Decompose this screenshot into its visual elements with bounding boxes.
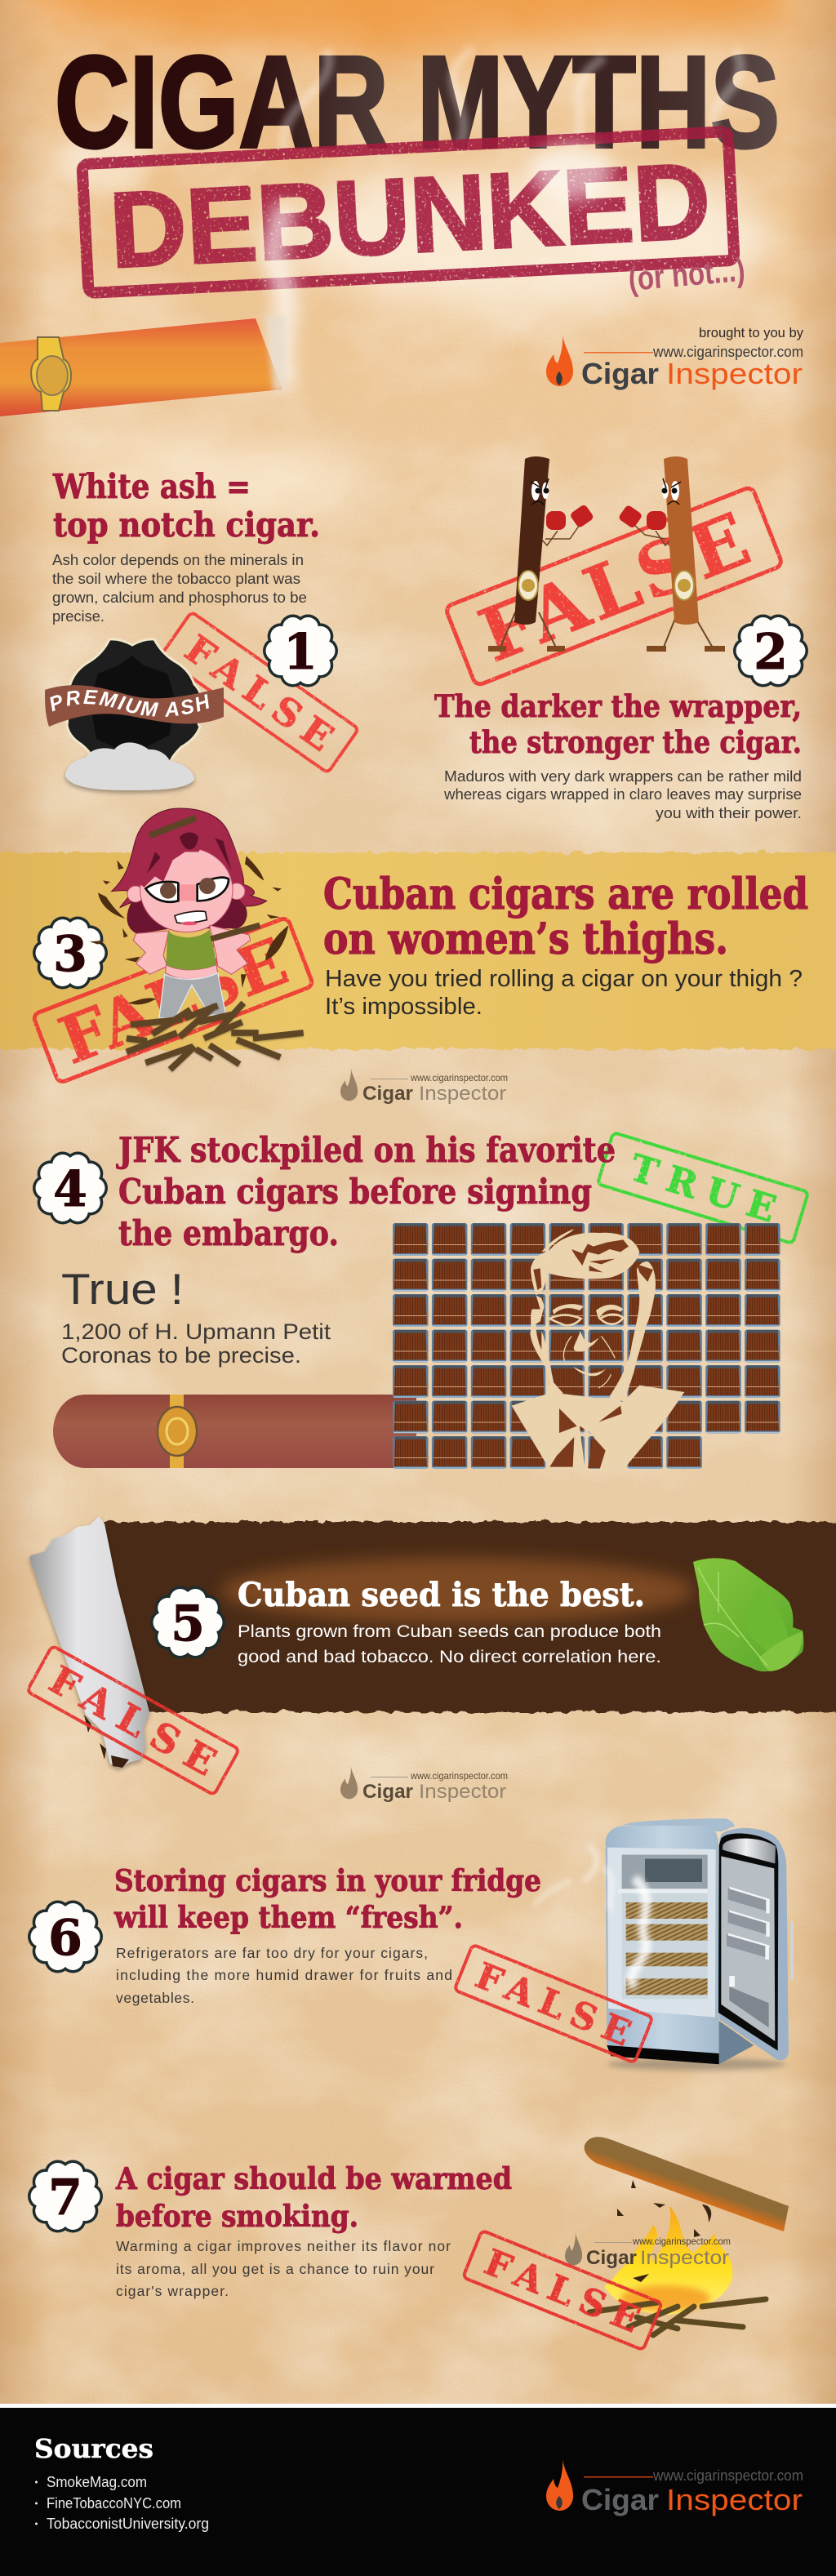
arms [133, 931, 169, 974]
logo: watermark 3 [565, 2232, 731, 2269]
logo: watermark 3: Inspector [640, 2247, 729, 2269]
myth 7 body text: cigar's wrapper. [116, 2283, 229, 2299]
logo: Cigar Inspector header [546, 335, 803, 390]
logo: footer: www.cigarinspector.com [652, 2467, 803, 2484]
embers [617, 2180, 711, 2282]
panel: yellow torn band [0, 852, 836, 1049]
pants [159, 973, 226, 1018]
illustration: boxing cigars [488, 456, 725, 652]
myth 4 body text: Coronas to be precise. [61, 1343, 301, 1368]
myth 2 heading [434, 688, 802, 760]
myth 3 body text [325, 966, 803, 1020]
badge: 7 [28, 2160, 103, 2232]
myth 2 body text: whereas cigars wrapped in claro leaves may surprise [443, 786, 802, 803]
lips [573, 1367, 607, 1376]
logo: watermark 2: www.cigarinspector.com [410, 1770, 508, 1782]
flying tobacco leaves [90, 856, 288, 1004]
icon: torn paper curl [29, 1516, 149, 1768]
firewood [589, 2299, 766, 2335]
logo: Cigar Inspector header: www.cigarinspector.com [652, 344, 803, 360]
badge: 4 [33, 1151, 108, 1225]
light cigar [664, 456, 699, 625]
sources list: TobacconistUniversity.org [47, 2516, 209, 2532]
myth 1 heading: top notch cigar. [53, 505, 320, 545]
freezer [622, 1855, 708, 1889]
hair outline [541, 1229, 574, 1252]
myth 7 body text [116, 2238, 451, 2299]
icon: premium ash seal [45, 638, 224, 795]
badge: 6 [28, 1901, 103, 1973]
collar and chest [512, 1386, 684, 1470]
illustration: JFK portrait cutout [512, 1229, 684, 1470]
stamp: false 3: FALSE [49, 923, 298, 1079]
myth 1 heading [52, 467, 320, 545]
eyes [178, 884, 198, 901]
face [140, 848, 233, 932]
left hair and temple [531, 1252, 549, 1296]
illustration: lit cigar [0, 314, 286, 416]
brush stroke [220, 1558, 694, 1623]
myth 4 body text: 1,200 of H. Upmann Petit [61, 1319, 331, 1344]
brought to you by: brought to you by [699, 325, 803, 340]
myth 6 heading [113, 1864, 541, 1935]
sources list: FineTobaccoNYC.com [47, 2495, 181, 2511]
myth 6 body text: vegetables. [116, 1990, 194, 2006]
badge: 5: 5 [171, 1595, 205, 1653]
door inner [721, 1856, 775, 2041]
sources list: SmokeMag.com [47, 2474, 147, 2490]
stamp: false 6: FALSE [469, 1955, 637, 2054]
hair fringe [125, 821, 242, 888]
nose [574, 1331, 602, 1351]
myth 6 heading: Storing cigars in your fridge [114, 1864, 541, 1898]
right hair and cheek strip [610, 1261, 656, 1407]
badge: 5 [150, 1586, 225, 1659]
faces [531, 481, 540, 501]
illustration: cigar over fire [585, 2137, 789, 2335]
myth 5 heading: Cuban seed is the best. [238, 1576, 645, 1614]
door outer [719, 1828, 789, 2060]
lower side [719, 2021, 754, 2064]
myth 1 body text [52, 552, 307, 625]
fridge top back [623, 1818, 735, 1831]
illustration: angry girl [90, 808, 304, 1070]
tank top [166, 929, 216, 970]
ash pile [65, 742, 194, 790]
myth 1 body text: grown, calcium and phosphorus to be [52, 589, 307, 606]
flames [604, 2206, 732, 2315]
logo: Cigar Inspector header: Cigar [581, 357, 659, 390]
myth 7 heading: A cigar should be warmed [115, 2162, 512, 2196]
logo: footer: Cigar [581, 2483, 659, 2516]
myth 6 body text: including the more humid drawer for fruits and [116, 1967, 452, 1983]
sources heading: Sources [34, 2433, 153, 2464]
stamp: false 1: FALSE [177, 626, 341, 760]
badge: 7: 7 [48, 2169, 82, 2227]
stamp: false 5: FALSE [42, 1657, 224, 1786]
mouth [175, 911, 207, 923]
myth 2 body text [443, 768, 802, 821]
door shelves [727, 1888, 769, 1958]
myth 7 heading [115, 2162, 512, 2234]
logo: watermark 3: www.cigarinspector.com [632, 2236, 731, 2247]
cigar bands [518, 571, 538, 600]
icon: tobacco leaves [693, 1558, 803, 1671]
badge: 2 [733, 614, 808, 687]
myth 3 heading [323, 870, 808, 964]
brows and eyes [553, 1304, 623, 1319]
head-top cigar [149, 818, 196, 835]
myth 4 body text [61, 1319, 331, 1368]
arms [527, 523, 686, 545]
myth 2 body text: you with their power. [656, 805, 802, 821]
dark cigar [514, 456, 549, 625]
myth 3 body text: It’s impossible. [325, 994, 482, 1020]
pile of cigars [127, 1003, 304, 1070]
panel [607, 1848, 716, 2018]
myth 3 heading: on women’s thighs. [323, 914, 728, 964]
sources list [35, 2474, 209, 2532]
door frame [718, 1833, 778, 2051]
chart: grid of cigar boxes [393, 1223, 784, 1470]
myth 4 heading: the embargo. [118, 1213, 339, 1253]
myth 2 body text: Maduros with very dark wrappers can be rather mild [444, 768, 802, 785]
myth 5 body text [238, 1622, 661, 1666]
egg tray [729, 1987, 769, 2027]
legs [500, 612, 714, 649]
badge: 1: 1 [283, 624, 318, 681]
logo: watermark 1: Cigar [362, 1083, 413, 1105]
hair cuts [571, 1239, 629, 1266]
ribbon [45, 685, 224, 727]
logo: watermark 1 [340, 1068, 508, 1105]
logo: watermark 2: Cigar [362, 1781, 413, 1803]
myth 7 body text: its aroma, all you get is a chance to ruin your [116, 2261, 434, 2277]
logo: watermark 2 [340, 1766, 508, 1803]
myth 5 body text: good and bad tobacco. No direct correlation here. [238, 1648, 661, 1666]
stamp: Debunked: DEBUNKED [107, 140, 713, 290]
door top panel [723, 1839, 776, 1863]
fridge front [606, 1826, 719, 2064]
myth 4 heading: JFK stockpiled on his favorite [116, 1130, 616, 1170]
ribbon label: PREMIUM ASH [50, 689, 209, 717]
myth 6 heading: will keep them “fresh”. [113, 1901, 463, 1935]
badge: 1 [263, 614, 338, 687]
logo: footer [546, 2459, 803, 2516]
midriff [166, 965, 218, 979]
myth 4 heading [116, 1130, 616, 1253]
compartment [622, 1855, 708, 1999]
logo: watermark 3: Cigar [586, 2247, 637, 2269]
badge: 3 [33, 916, 108, 990]
myth 1 body text: the soil where the tobacco plant was [52, 571, 300, 587]
gloves [546, 504, 666, 530]
feet [488, 646, 725, 652]
stamp: true: TRUE [625, 1146, 781, 1231]
myth 4 heading: Cuban cigars before signing [118, 1172, 592, 1212]
logo: watermark 1: Inspector [419, 1083, 506, 1105]
myth 2 heading: The darker the wrapper, [434, 688, 802, 724]
rising smoke over stamp [273, 143, 612, 384]
stamp: false 1 [161, 612, 358, 773]
cigar shelves [626, 1902, 708, 1919]
myth 4 true label: True ! [61, 1266, 184, 1314]
panel: dark brown torn band [101, 1522, 836, 1712]
illustration: open fridge [533, 1818, 794, 2071]
logo: watermark 2: Inspector [419, 1781, 506, 1803]
myth 1 body text: precise. [52, 608, 104, 625]
hair back [112, 808, 267, 933]
myth 1 heading: White ash = [52, 467, 251, 506]
smoke [533, 1845, 647, 1987]
stamp: false 7 [463, 2231, 662, 2350]
door handle [790, 1921, 794, 1980]
myth 6 body text [116, 1945, 452, 2006]
header smoke glow [61, 33, 784, 306]
panel: footer [0, 2404, 836, 2576]
stamp: false 2: FALSE [468, 496, 761, 679]
stamp: false 7: FALSE [478, 2241, 646, 2341]
neck [541, 1331, 563, 1395]
logo: Cigar Inspector header: Inspector [666, 357, 803, 390]
myth 5 body text: Plants grown from Cuban seeds can produce both [238, 1622, 661, 1641]
held cigar [211, 925, 260, 939]
stamp: true [598, 1132, 808, 1244]
badge: 2: 2 [754, 624, 788, 681]
ears [127, 886, 144, 902]
badge: 4: 4 [53, 1161, 87, 1218]
myth 7 body text: Warming a cigar improves neither its flavor nor [116, 2238, 451, 2254]
logo: watermark 1: www.cigarinspector.com [410, 1072, 508, 1083]
illustration: large cigar [53, 1395, 416, 1468]
logo: footer: Inspector [666, 2483, 803, 2516]
myth 3 body text: Have you tried rolling a cigar on your thigh ? [325, 966, 803, 992]
left ear and jaw line [530, 1296, 545, 1365]
base [607, 2045, 719, 2064]
badge: 6: 6 [48, 1910, 82, 1967]
badge: 3: 3 [53, 926, 87, 983]
myth 7 heading: before smoking. [116, 2200, 358, 2234]
myth 6 body text: Refrigerators are far too dry for your cigars, [116, 1945, 428, 1961]
myth 1 body text: Ash color depends on the minerals in [52, 552, 304, 568]
forehead [546, 1233, 639, 1279]
warmed cigar [585, 2137, 789, 2231]
subtitle: or not: (or not...) [627, 251, 746, 298]
